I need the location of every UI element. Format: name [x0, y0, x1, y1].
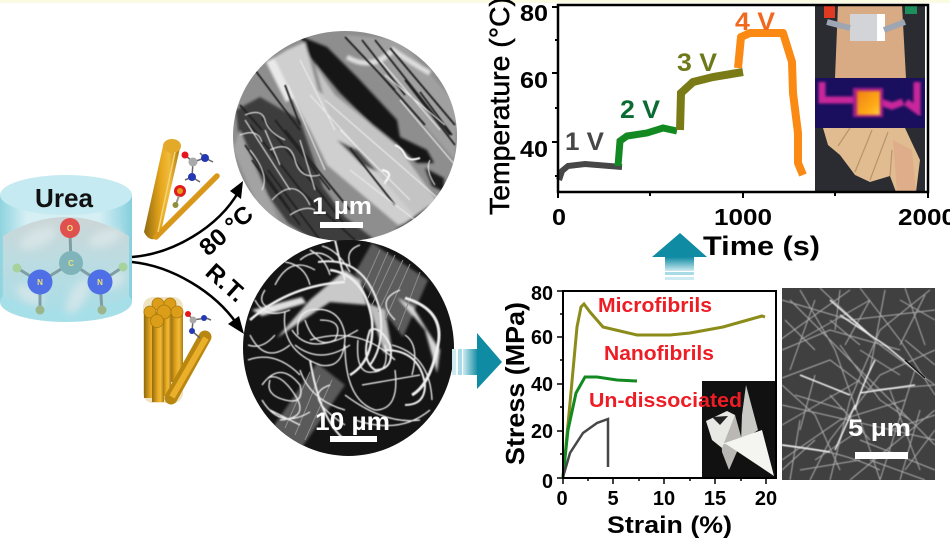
scale bar [855, 452, 908, 459]
label: R.T.: R.T. [200, 258, 251, 308]
voltage labels: 1 V [565, 128, 604, 156]
x tick labels: 1000 [714, 204, 772, 230]
x tick labels [552, 204, 950, 230]
voltage labels: 2 V [620, 96, 660, 124]
y tick labels: 20 [531, 421, 553, 443]
y tick labels: 40 [531, 374, 553, 396]
scale bar [330, 436, 377, 442]
urea molecule [12, 218, 128, 314]
curve: un-dissociated [563, 419, 608, 477]
chart: stress vs strain [500, 283, 777, 539]
curve: 2 V [618, 128, 677, 166]
arrow: to mechanical chart [452, 333, 502, 389]
axes frame [558, 5, 928, 192]
curve: microfibrils [563, 304, 765, 477]
x tick labels: 15 [704, 488, 726, 510]
chart: temperature vs time [484, 0, 950, 261]
curve: 1 V [559, 164, 622, 180]
x tick labels: 20 [755, 488, 777, 510]
y tick labels [531, 283, 553, 493]
series labels [589, 295, 742, 412]
panel: SEM image 1 µm [230, 25, 460, 250]
y tick labels: 80 [531, 283, 553, 305]
x tick labels [556, 488, 777, 510]
y tick labels: 60 [531, 327, 553, 349]
curve: nanofibrils [563, 377, 637, 477]
label: 80 °C: 80 °C [194, 200, 259, 262]
arrow: urea to 80 °C [132, 181, 243, 257]
y axis title: Stress (MPa) [500, 302, 530, 465]
axes frame [563, 291, 776, 478]
panel: SEM image 10 µm [240, 238, 460, 460]
y tick labels: 40 [520, 136, 548, 162]
icon: fibril bundle with urea, undissociated [143, 297, 211, 403]
urea molecule: N [37, 278, 43, 287]
x tick labels: 5 [607, 488, 619, 510]
crystals inside the cylinder [13, 221, 129, 317]
top strip [0, 0, 950, 3]
urea molecule: N [97, 278, 103, 287]
curve: 4 V [738, 33, 803, 175]
inset: wrist device photo [815, 5, 925, 193]
x tick labels: 10 [653, 488, 675, 510]
scale label: 10 µm [315, 408, 390, 436]
heading: Urea: Urea [35, 183, 94, 213]
x tick labels: 0 [556, 488, 568, 510]
urea molecule: O [67, 224, 73, 233]
x axis title: Time (s) [703, 231, 820, 261]
panel: urea cylinder [0, 175, 132, 322]
inset: origami crane photo [702, 381, 776, 478]
icon: fibril with urea, dissociated [144, 139, 217, 239]
y axis title: Temperature (°C) [484, 0, 515, 215]
voltage labels: 4 V [735, 8, 775, 36]
arrow: urea to R.T. [132, 262, 244, 334]
voltage labels: 3 V [677, 49, 717, 77]
scale bar [320, 222, 363, 228]
urea molecule: C [68, 259, 74, 268]
x tick labels: 0 [552, 204, 566, 230]
scale label: 1 µm [312, 193, 372, 220]
series labels: Un-dissociated [589, 390, 742, 412]
y tick labels: 60 [520, 67, 548, 93]
y tick labels: 0 [542, 471, 553, 493]
curve: 3 V [680, 72, 743, 130]
y tick labels [520, 0, 548, 162]
series labels: Microfibrils [598, 295, 712, 317]
x axis title: Strain (%) [607, 512, 732, 539]
arrow: to heating chart [652, 233, 707, 280]
panel: SEM image 5 µm [780, 288, 935, 480]
series labels: Nanofibrils [604, 343, 714, 365]
x tick labels: 2000 [898, 204, 950, 230]
inset: thermal image [815, 78, 925, 128]
scale label: 5 µm [848, 415, 911, 442]
voltage labels [565, 8, 775, 156]
y tick labels: 80 [520, 0, 548, 26]
